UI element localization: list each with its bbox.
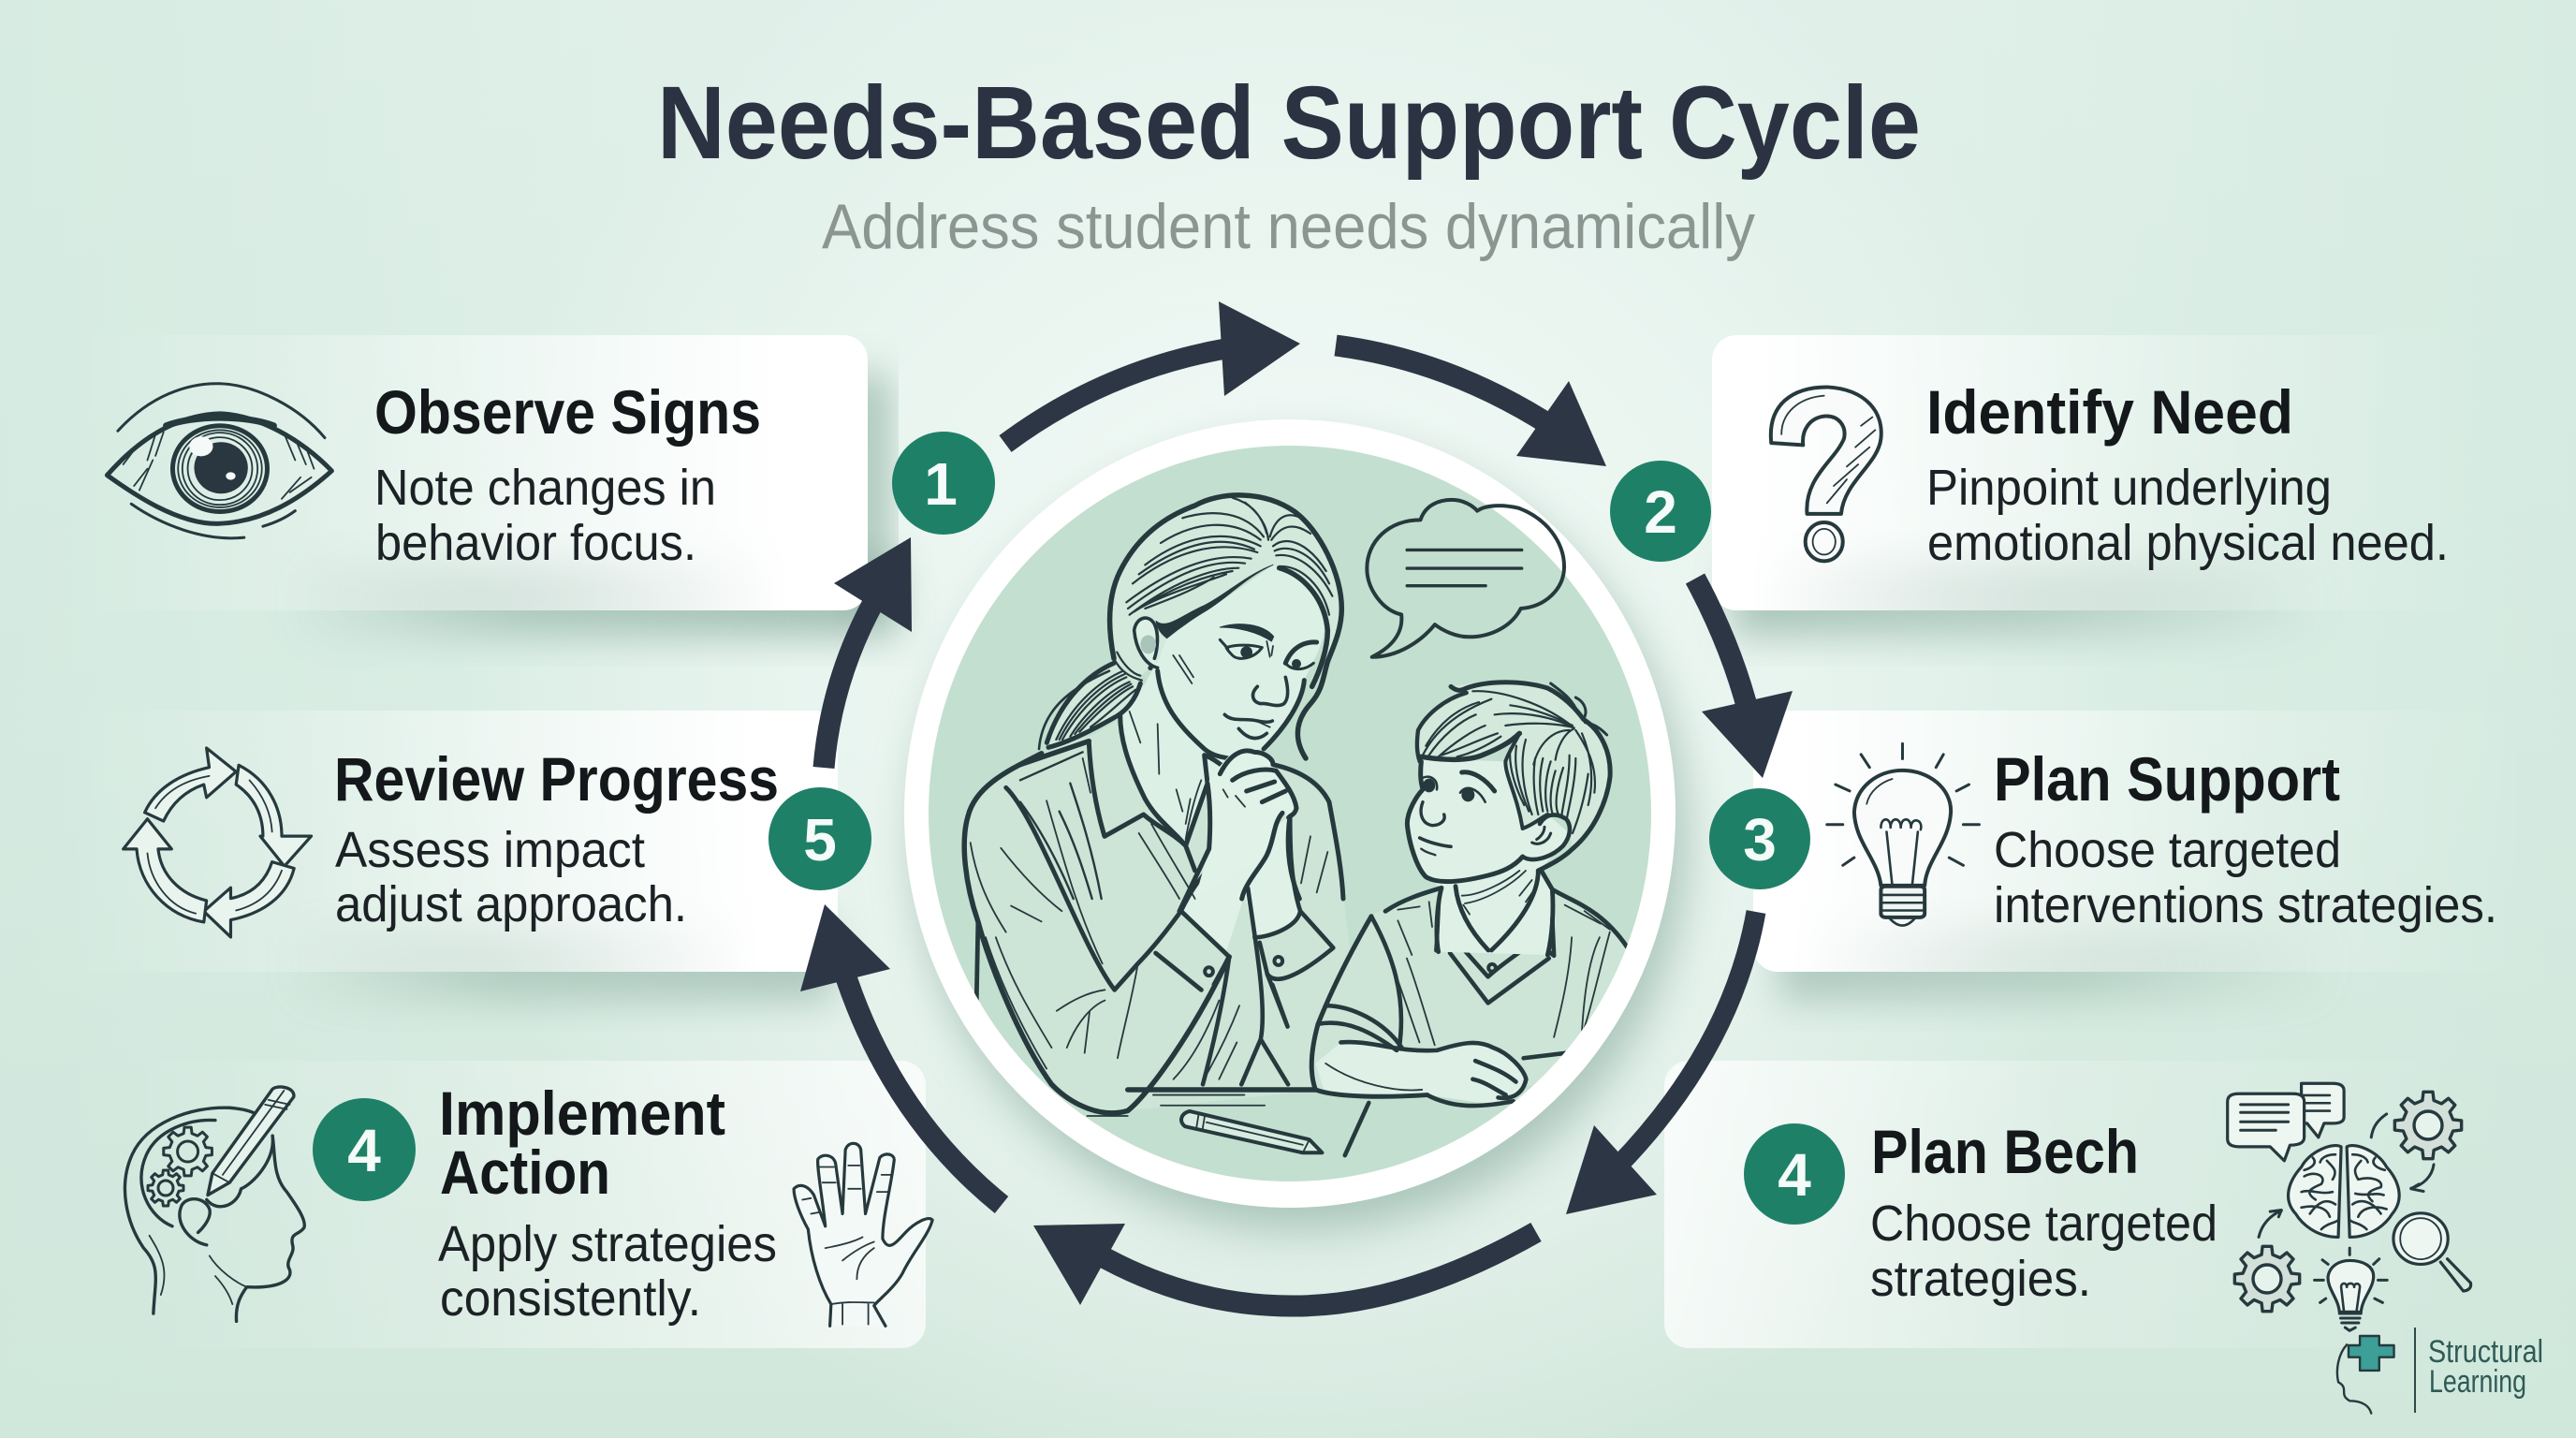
arrow: step 4 to plan bech xyxy=(1566,912,1756,1214)
icon: cycle arrows xyxy=(124,748,312,937)
arrow: plan bech to implement xyxy=(1033,1224,1536,1306)
panel: plan support xyxy=(1753,711,2530,1002)
arrow: step 1 to 2 xyxy=(1005,301,1300,444)
student head and collar xyxy=(1385,682,1627,955)
heading: plan support: Plan Support xyxy=(1994,744,2340,814)
text: implement action body: Apply strategies xyxy=(438,1216,777,1272)
illustration: teacher and student xyxy=(964,495,1628,1155)
heading: plan bech: Plan Bech xyxy=(1871,1117,2139,1186)
text: plan support body: interventions strategies. xyxy=(1994,877,2497,933)
teacher torso and arms xyxy=(964,719,1351,1116)
panel: plan bech xyxy=(1664,1061,2471,1348)
text: identify need body xyxy=(1926,460,2449,571)
badge: 3 xyxy=(1709,788,1810,889)
text: observe signs body xyxy=(374,460,716,571)
pencil xyxy=(1181,1111,1322,1152)
divider rule in logo xyxy=(2414,1328,2416,1413)
title: Needs-Based Support Cycle xyxy=(657,66,1921,181)
heading: implement action: Action xyxy=(440,1137,610,1207)
text: plan bech body: strategies. xyxy=(1870,1251,2091,1307)
panel: observe signs xyxy=(66,335,899,637)
arrow: step 2 to 3 xyxy=(1336,345,1606,466)
badge: 4 right xyxy=(1744,1123,1845,1225)
text: identify need body: emotional physical need. xyxy=(1927,515,2449,571)
badge: 3: 3 xyxy=(1743,806,1777,873)
heading: identify need: Identify Need xyxy=(1926,377,2293,447)
badge: 4 left: 4 xyxy=(347,1117,381,1184)
text: plan support body xyxy=(1994,822,2497,933)
heading: review progress: Review Progress xyxy=(334,744,779,814)
badge: 1: 1 xyxy=(924,450,958,518)
teacher figure xyxy=(964,495,1351,1116)
text: review progress body xyxy=(335,822,687,932)
text: plan support body: Choose targeted xyxy=(1994,822,2341,878)
heading: implement action: Implement xyxy=(439,1078,725,1148)
student body xyxy=(1311,874,1628,1155)
icon: brain with tools cluster xyxy=(2228,1083,2471,1330)
badge: 2 xyxy=(1610,461,1711,562)
icon: question mark xyxy=(1771,387,1881,561)
badge: 1 xyxy=(892,432,995,535)
text: plan bech body xyxy=(1870,1196,2217,1307)
icon: eye xyxy=(107,384,331,538)
arrow: implement to review xyxy=(800,904,1002,1205)
badge: 4 left xyxy=(313,1098,416,1201)
text: observe signs body: Note changes in xyxy=(374,460,716,516)
arrow: step 3 to 4 xyxy=(1695,579,1793,778)
text: implement action body xyxy=(438,1216,777,1327)
text: identify need body: Pinpoint underlying xyxy=(1926,460,2332,516)
heading: observe signs: Observe Signs xyxy=(374,377,761,447)
teacher head and collar xyxy=(1020,495,1343,911)
green disc xyxy=(929,446,1651,1181)
text: implement action body: consistently. xyxy=(440,1270,701,1327)
text: plan bech body: Choose targeted xyxy=(1870,1196,2217,1252)
badge: 5 xyxy=(768,787,871,890)
badge: 2: 2 xyxy=(1644,478,1677,546)
circle shadow xyxy=(915,445,1687,1231)
icon: light bulb xyxy=(1827,743,1979,926)
white ring xyxy=(904,419,1676,1208)
central illustration circle xyxy=(904,419,1687,1231)
logo: structural learning: Structural xyxy=(2428,1334,2543,1370)
logo: structural learning xyxy=(2337,1328,2543,1414)
arrow: review to observe xyxy=(824,537,912,768)
panel: identify need xyxy=(1712,335,2489,637)
badge: 5: 5 xyxy=(803,806,837,873)
logo: structural learning: Learning xyxy=(2429,1364,2526,1400)
badge: 4 right: 4 xyxy=(1778,1141,1811,1209)
heading: implement action xyxy=(439,1078,725,1207)
subtitle: Address student needs dynamically xyxy=(822,191,1755,262)
text: review progress body: Assess impact xyxy=(335,822,645,878)
text: observe signs body: behavior focus. xyxy=(375,515,696,571)
student figure xyxy=(1311,682,1628,1155)
icon: head with pencil xyxy=(124,1087,304,1321)
icon: hand xyxy=(794,1143,932,1326)
panel: review progress xyxy=(66,711,838,1002)
text: review progress body: adjust approach. xyxy=(335,876,687,932)
panel: implement action xyxy=(122,1061,932,1348)
speech bubble xyxy=(1367,500,1564,657)
